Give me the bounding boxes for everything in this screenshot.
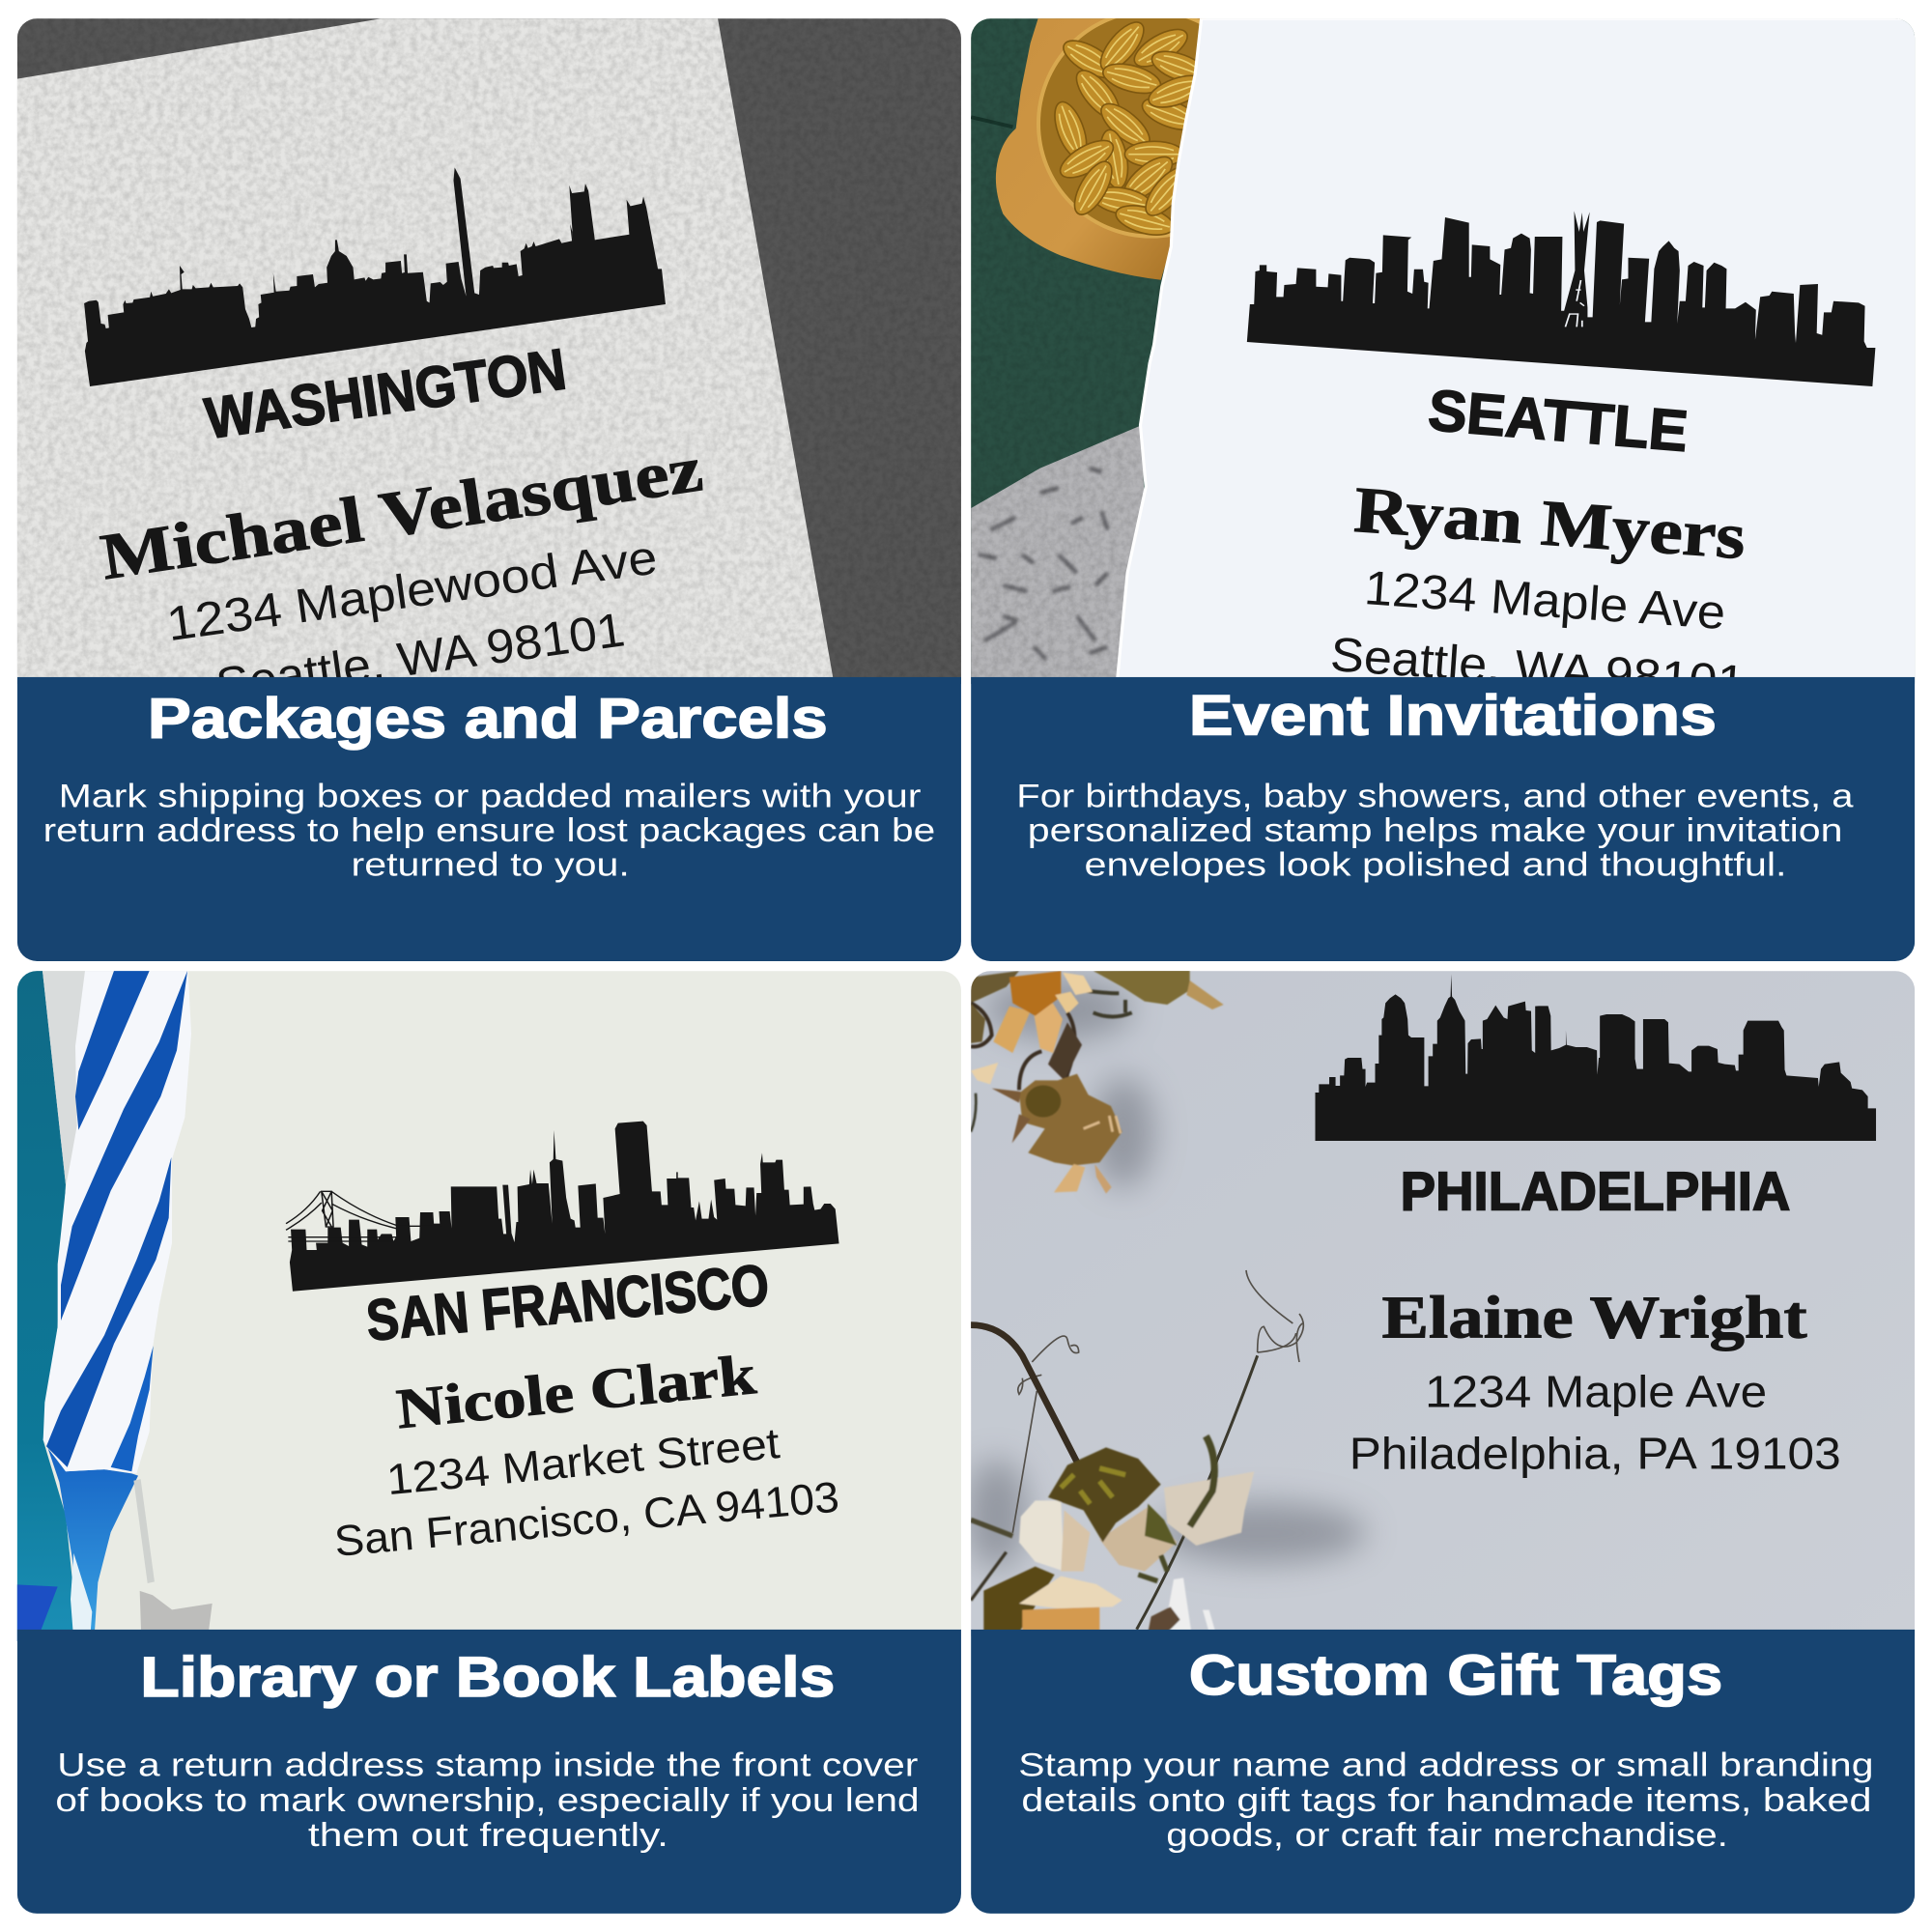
striped candle with teal backdrop [16,971,213,1641]
soft flower shadows [966,979,1367,1570]
caption band [17,677,961,967]
skyline: San Francisco [286,1122,839,1292]
icon: dried flowers bottom left [971,1270,1303,1633]
photo: Washington stamp on paper [17,18,961,712]
stamp address line 2: Seattle, WA 98101 [213,602,628,712]
stamp city: PHILADELPHIA: PHILADELPHIA [1401,1161,1790,1222]
description [43,779,935,883]
panel: Library or Book Labels [16,971,961,1919]
heading: Packages and Parcels [148,687,828,750]
description: personalized stamp helps make your invitation [1028,812,1843,849]
description: For birthdays, baby showers, and other events, a [1016,779,1854,815]
description: Use a return address stamp inside the front cover [57,1747,918,1784]
skyline: Seattle [1247,211,1875,386]
icon: gold wax seal [995,18,1202,280]
panel: Event Invitations [971,11,1918,967]
description: returned to you. [352,846,630,883]
panel: Custom Gift Tags [966,969,1915,1919]
stamp address line 2: Philadelphia, PA 19103 [1350,1428,1841,1478]
caption band [971,1630,1915,1919]
stamp city: SAN FRANCISCO: SAN FRANCISCO [364,1252,772,1353]
stamp name: Elaine Wright [1382,1284,1807,1351]
stamp name: Nicole Clark [394,1343,759,1440]
stamp address line 2: San Francisco, CA 94103 [332,1474,841,1566]
description: them out frequently. [308,1817,668,1854]
description [55,1747,920,1854]
stamp name: Ryan Myers [1351,473,1747,573]
description: return address to help ensure lost packages can be [43,812,935,849]
description: details onto gift tags for handmade items, baked [1021,1782,1872,1819]
panel: Packages and Parcels [17,18,961,967]
stamp address line 1: 1234 Maple Ave [1363,560,1727,639]
icon: dried flowers top left [971,969,1224,1194]
description: goods, or craft fair merchandise. [1166,1817,1728,1854]
skyline: Philadelphia [1316,974,1876,1141]
photo: Seattle stamp on torn paper [971,11,1918,710]
stamp address line 1: 1234 Maplewood Ave [163,529,661,651]
description [1016,779,1854,883]
description [1018,1747,1873,1854]
heading: Library or Book Labels [140,1646,835,1709]
stamp address line 2: Seattle, WA 98101 [1329,627,1747,710]
heading: Event Invitations [1189,684,1717,747]
heading: Custom Gift Tags [1189,1644,1722,1707]
photo: Philadelphia stamp with dried flowers [966,969,1915,1636]
photo: San Francisco stamp beside candle [16,971,961,1641]
caption band [971,677,1915,967]
description: Stamp your name and address or small branding [1018,1747,1873,1784]
description: envelopes look polished and thoughtful. [1084,846,1787,883]
description: Mark shipping boxes or padded mailers with your [59,779,922,815]
stamp city: SEATTLE: SEATTLE [1426,378,1690,464]
description: of books to mark ownership, especially if you lend [55,1782,920,1819]
caption band [17,1630,961,1919]
stamp address line 1: 1234 Maple Ave [1425,1367,1767,1417]
stamp city: WASHINGTON: WASHINGTON [201,336,570,451]
torn paper sheet [1117,18,1918,684]
stamp name: Michael Velasquez [97,432,707,593]
stamp address line 1: 1234 Market Street [384,1420,782,1504]
skyline: Washington [84,167,666,386]
